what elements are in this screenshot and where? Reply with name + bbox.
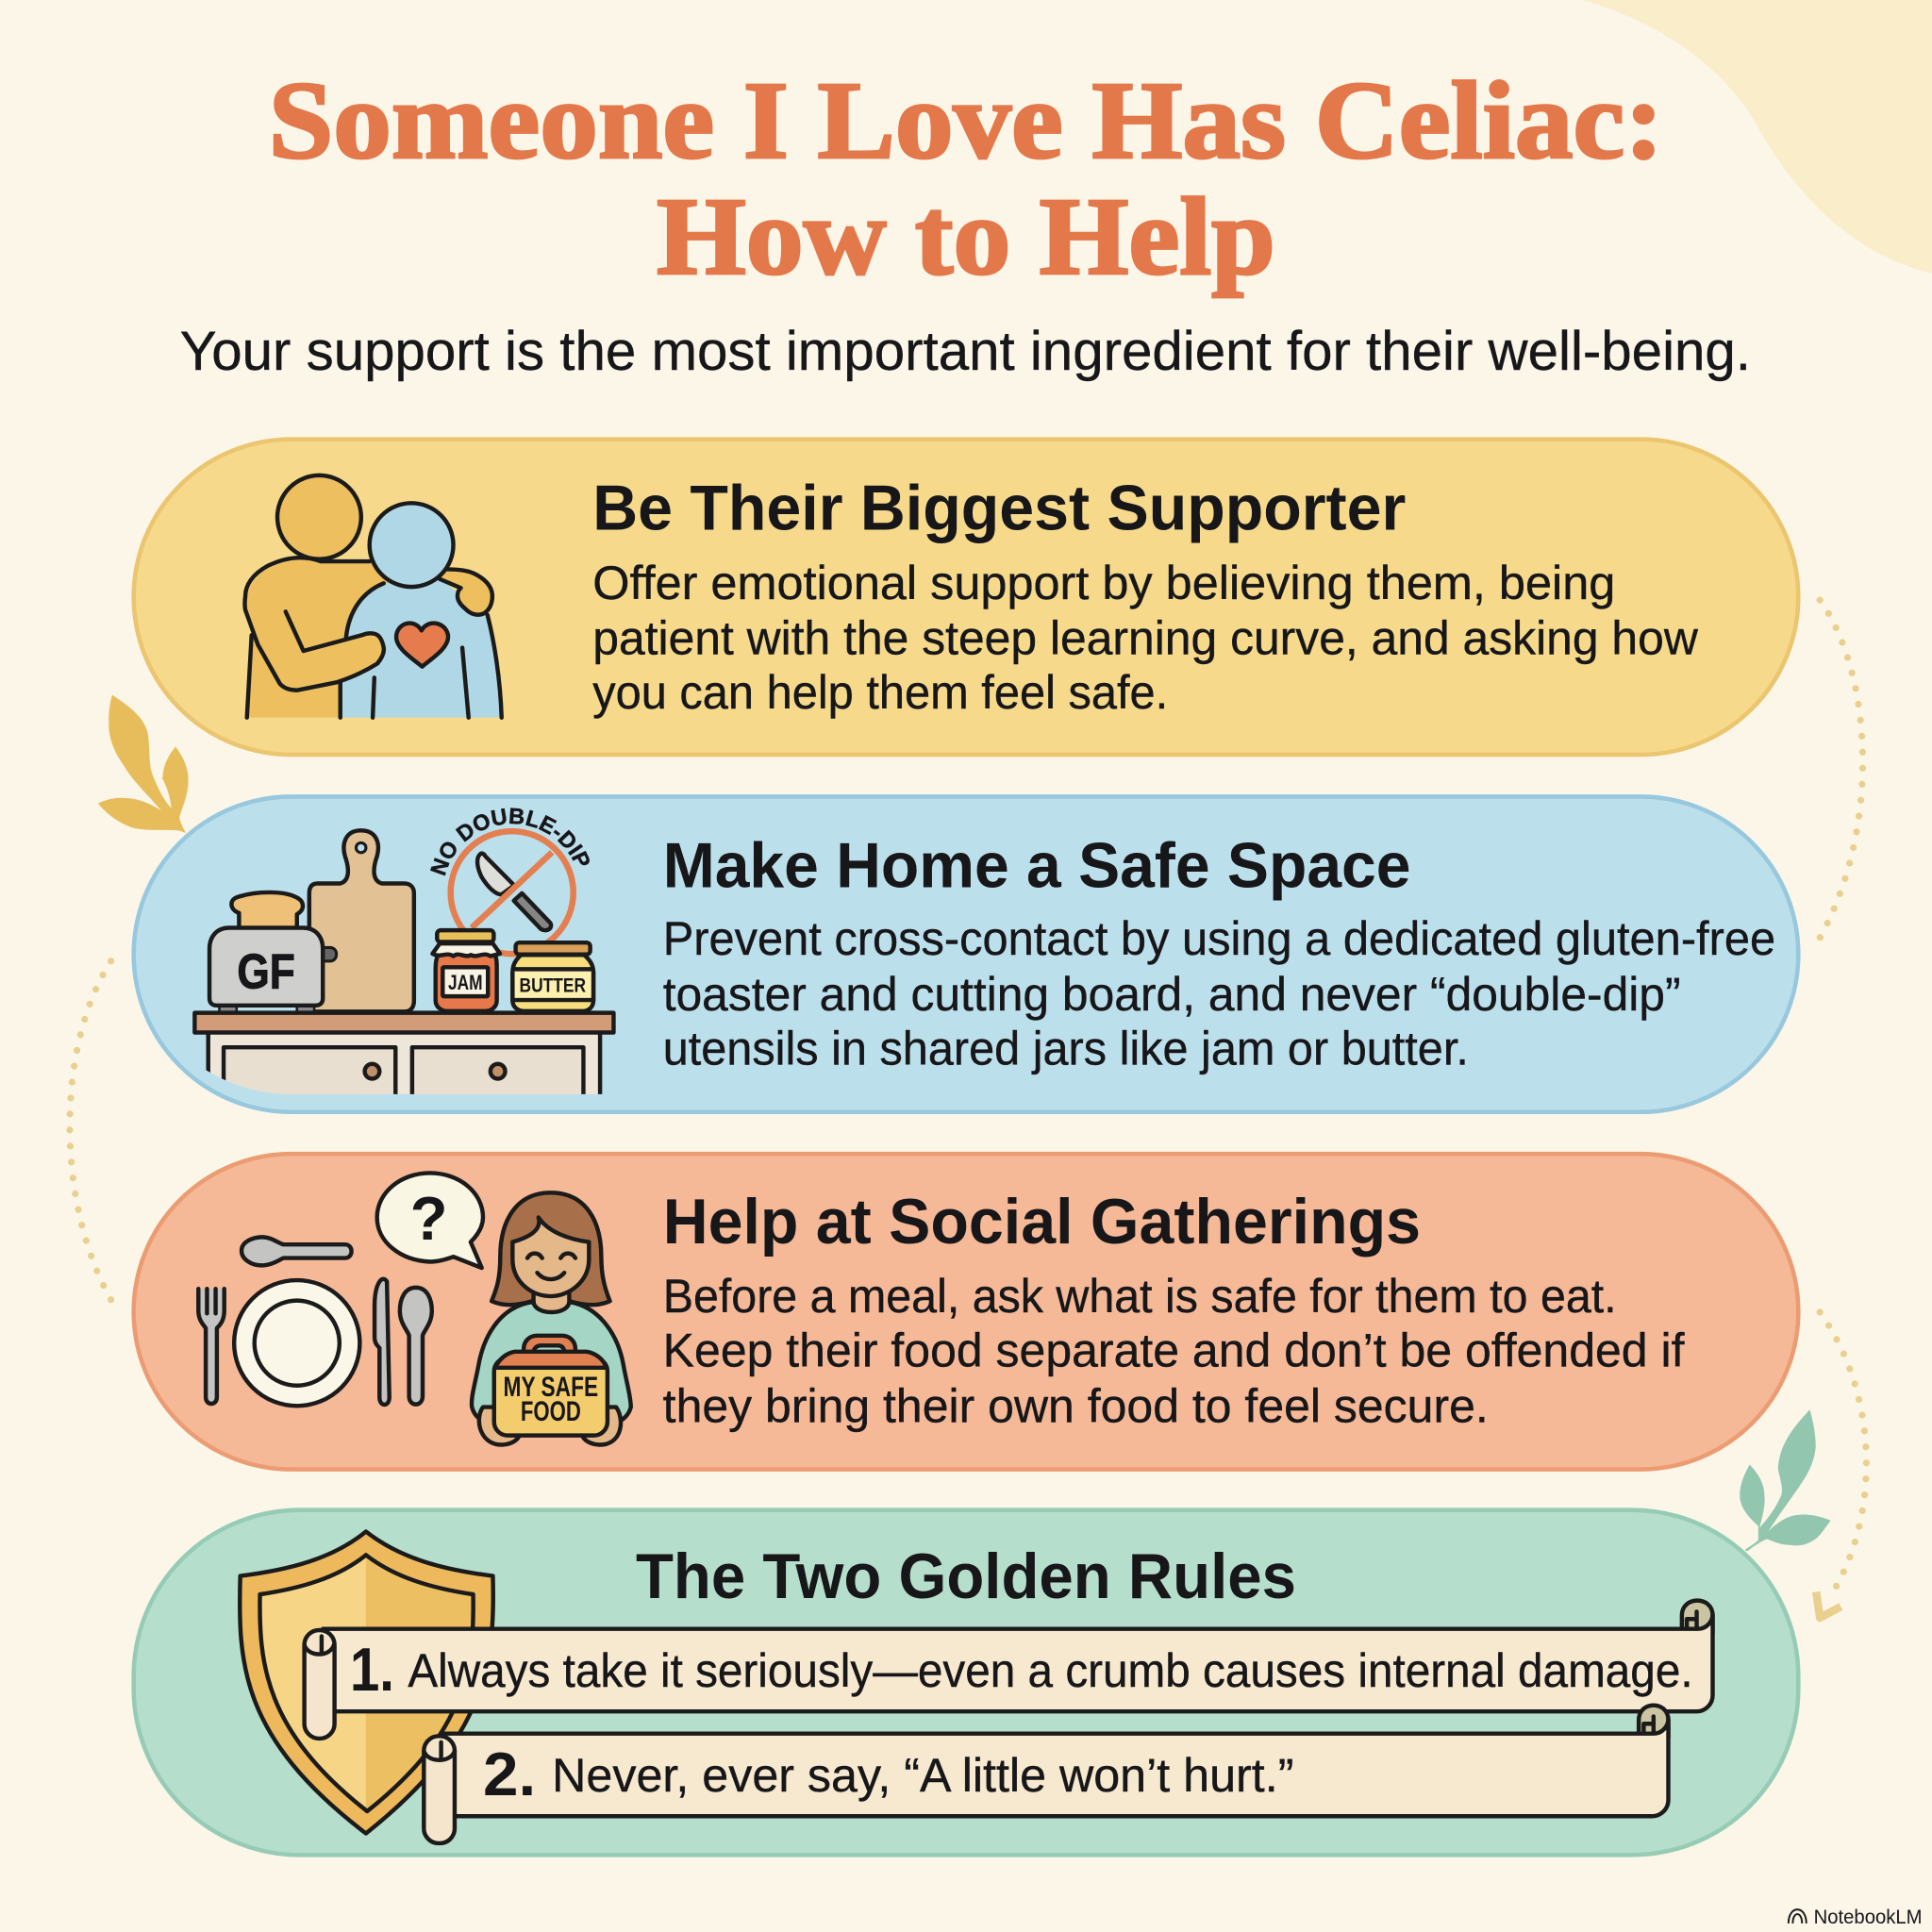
panel: make home a safe space <box>131 794 1801 1114</box>
rule 1 scroll <box>305 1601 1713 1739</box>
toast <box>231 892 303 929</box>
lunchbox <box>494 1357 608 1436</box>
title: Someone I Love Has Celiac: <box>269 59 1663 182</box>
body text <box>592 557 1698 719</box>
blue body fill <box>341 579 502 718</box>
spoon right <box>400 1288 432 1405</box>
face <box>512 1217 589 1296</box>
rule 1 number: 1. <box>350 1635 394 1704</box>
hand fill <box>440 569 492 615</box>
plate <box>234 1280 359 1406</box>
icon: person holding lunchbox <box>472 1192 631 1444</box>
icon: green leaf sprig <box>1740 1409 1831 1551</box>
butter jar: BUTTER <box>520 973 586 996</box>
rule 2 number: 2. <box>483 1740 536 1808</box>
hair <box>491 1192 610 1305</box>
heading: Make Home a Safe Space <box>663 830 1411 901</box>
subtitle: Your support is the most important ingredient for their well-being. <box>180 321 1751 382</box>
body text: Before a meal, ask what is safe for them to eat. <box>663 1270 1617 1323</box>
knife <box>477 854 514 894</box>
icon: two people hugging <box>244 475 502 718</box>
scroll body <box>441 1719 1668 1816</box>
icon: question speech bubble <box>377 1173 483 1268</box>
body text: toaster and cutting board, and never “double-dip” <box>663 968 1681 1021</box>
right curl <box>1682 1601 1713 1633</box>
torso <box>472 1303 631 1424</box>
panel background <box>134 1510 1798 1855</box>
body text: Prevent cross-contact by using a dedicated gluten-free <box>663 912 1775 965</box>
jam jar: JAM <box>448 971 483 994</box>
icon: question speech bubble: ? <box>410 1184 447 1253</box>
neck <box>534 1288 569 1312</box>
NotebookLM logo: NotebookLM <box>1814 1905 1923 1928</box>
panel: the two golden rules <box>134 1510 1798 1855</box>
title: How to Help <box>657 175 1275 298</box>
arc text: NO DOUBLE-DIP <box>430 808 590 875</box>
arm fill <box>245 579 384 691</box>
title <box>269 59 1663 298</box>
right curl <box>1639 1706 1668 1738</box>
no-double-dip sign <box>451 831 574 954</box>
panel background <box>134 1154 1798 1470</box>
rule 2 scroll <box>424 1706 1668 1843</box>
panel background <box>134 796 1798 1112</box>
icon: kitchen counter scene <box>192 808 616 1094</box>
jam jar <box>432 930 500 1011</box>
icon: place setting <box>198 1237 432 1406</box>
body text <box>663 1270 1685 1432</box>
cutting board <box>309 830 414 1011</box>
spoon top <box>242 1237 352 1265</box>
body text: Offer emotional support by believing them, being <box>592 557 1615 609</box>
icon: kitchen counter scene: GF <box>237 945 295 1000</box>
body text: patient with the steep learning curve, and asking how <box>592 612 1698 665</box>
decorative corner blob <box>1583 0 1932 274</box>
lunchbox handle <box>524 1336 575 1363</box>
rule 2 text: Never, ever say, “A little won’t hurt.” <box>552 1749 1293 1802</box>
butter jar <box>512 942 593 1011</box>
toaster lever <box>318 947 337 961</box>
outlines <box>247 583 502 718</box>
lunchbox label: FOOD <box>521 1396 581 1427</box>
body text <box>663 912 1775 1074</box>
arrow: dotted connector panel 2 to 3 <box>70 961 114 1306</box>
scroll body <box>323 1614 1713 1711</box>
icon: yellow leaf sprig <box>98 695 189 833</box>
panel background <box>134 440 1798 755</box>
left roll <box>305 1630 335 1739</box>
panel: be their biggest supporter <box>134 440 1798 755</box>
arrow: dotted connector panel 3 to 4 <box>1816 1312 1866 1618</box>
lunchbox label <box>504 1372 598 1427</box>
arrow: dotted connector panel 1 to 2 <box>1815 600 1863 946</box>
icon: shield <box>240 1532 493 1834</box>
rule 1 text: Always take it seriously—even a crumb causes internal damage. <box>408 1644 1693 1697</box>
toaster feet <box>219 1003 314 1013</box>
heading: Help at Social Gatherings <box>663 1187 1421 1257</box>
body text: they bring their own food to feel secure. <box>663 1379 1489 1432</box>
panel: help at social gatherings <box>134 1154 1798 1470</box>
body text: you can help them feel safe. <box>592 666 1168 719</box>
heading: Be Their Biggest Supporter <box>592 474 1406 544</box>
lunchbox label: MY SAFE <box>504 1372 598 1403</box>
hands <box>479 1407 621 1444</box>
toaster <box>209 928 323 1006</box>
left roll <box>424 1736 455 1843</box>
heading: The Two Golden Rules <box>636 1541 1296 1612</box>
knife <box>375 1279 390 1405</box>
countertop <box>194 1013 613 1033</box>
fork <box>198 1289 225 1404</box>
body text: utensils in shared jars like jam or butter. <box>663 1022 1469 1074</box>
body text: Keep their food separate and don’t be offended if <box>663 1324 1685 1376</box>
yellow body fill <box>245 559 407 718</box>
cabinet <box>208 1033 600 1099</box>
